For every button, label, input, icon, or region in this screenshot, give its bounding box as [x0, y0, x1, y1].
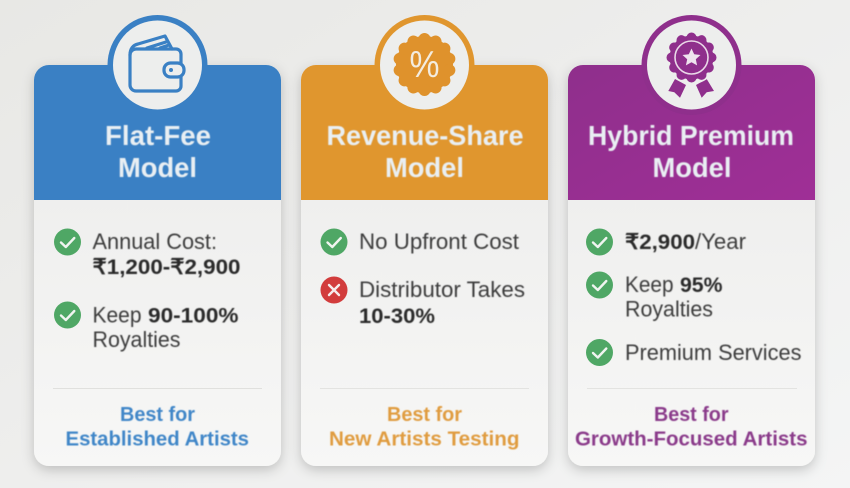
text: royalties: Royalties: [625, 296, 713, 322]
text: royalties: Royalties: [92, 327, 180, 352]
heading: [105, 120, 211, 183]
heading: Hybrid Premium: [588, 120, 794, 151]
heading: Model: [652, 152, 732, 183]
card header: [301, 65, 548, 200]
panel: revenue-share model: [301, 15, 548, 466]
text: royalties: [625, 272, 722, 322]
text: premium services: Premium Services: [625, 340, 802, 365]
icon: medal: [642, 15, 742, 115]
panel: flat-fee model: [34, 15, 281, 466]
heading: Model: [118, 152, 197, 183]
icon: check: [54, 302, 81, 328]
panel: hybrid premium model: [568, 15, 815, 466]
best for label: [66, 404, 249, 450]
text: distributor takes: 10-30%: [359, 304, 435, 328]
card body: [34, 65, 281, 466]
text: distributor takes: [359, 277, 525, 328]
card body: [301, 65, 548, 466]
text: price per year: ₹2,900: [625, 230, 695, 254]
text: annual cost: [92, 229, 241, 279]
text: royalties: Keep: [625, 272, 674, 297]
icon: wallet: [108, 15, 208, 115]
icon: check: [586, 272, 613, 298]
text: annual cost: Annual Cost:: [92, 229, 217, 254]
text: annual cost: ₹1,200-₹2,900: [92, 255, 241, 279]
icon: cross: [320, 276, 348, 304]
icon: check: [54, 228, 81, 256]
text: royalties: Keep: [92, 302, 142, 328]
text: royalties: 90-100%: [148, 304, 238, 328]
icon: check: [586, 228, 613, 256]
heading: Model: [385, 152, 464, 183]
text: no upfront cost: No Upfront Cost: [359, 229, 519, 254]
heading: Revenue-Share: [326, 120, 524, 151]
card body: [568, 65, 815, 466]
best for label: Best for: [654, 404, 729, 426]
best for label: [329, 404, 520, 450]
text: price per year: /Year: [695, 229, 746, 254]
heading: [588, 120, 794, 183]
text: distributor takes: Distributor Takes: [359, 277, 525, 302]
best for label: [575, 404, 808, 450]
heading: Flat-Fee: [105, 120, 211, 151]
best for label: Growth-Focused Artists: [575, 428, 808, 450]
card header: [568, 65, 815, 200]
best for label: New Artists Testing: [329, 428, 520, 450]
icon: percent badge: %: [410, 44, 440, 85]
icon: check: [320, 228, 348, 256]
card header: [34, 65, 281, 200]
heading: [326, 120, 524, 183]
text: royalties: 95%: [680, 273, 722, 297]
icon: check: [586, 339, 613, 366]
text: price per year: [625, 229, 746, 254]
text: royalties: [92, 302, 238, 352]
best for label: Established Artists: [66, 428, 249, 450]
icon: percent badge: [374, 15, 474, 115]
best for label: Best for: [120, 404, 195, 426]
best for label: Best for: [387, 404, 462, 426]
